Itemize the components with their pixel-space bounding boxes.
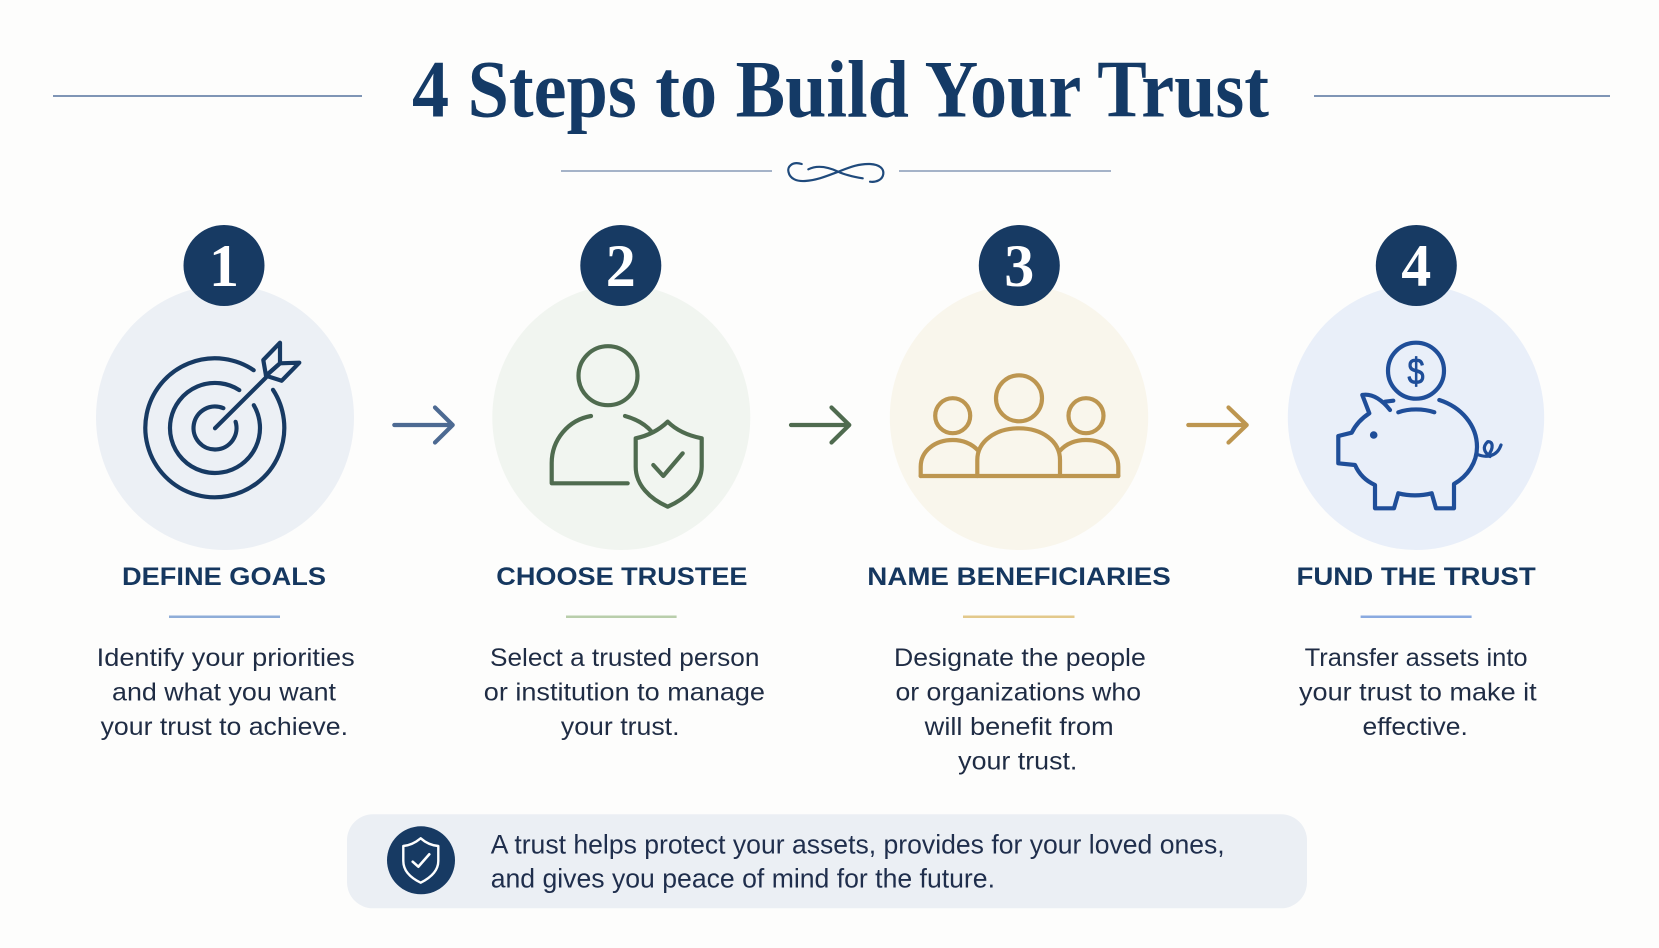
step 2 description: your trust. xyxy=(561,713,680,741)
step 1 number badge xyxy=(184,225,264,306)
icon: shield badge xyxy=(387,826,455,894)
title: 4 Steps to Build Your Trust xyxy=(412,44,1269,134)
step 4 number badge xyxy=(1376,225,1457,306)
arrow 2 xyxy=(791,408,849,442)
callout text xyxy=(491,830,1225,894)
step 1 background circle xyxy=(96,285,354,550)
step 3 number badge xyxy=(979,225,1060,306)
step 2: choose trustee xyxy=(484,225,765,741)
icon: piggy bank with coin: $ xyxy=(1408,351,1424,392)
step 2 heading: CHOOSE TRUSTEE xyxy=(496,563,748,591)
step 3 description: will benefit from xyxy=(924,713,1114,741)
step 3 description xyxy=(894,644,1146,776)
icon: target with arrow xyxy=(145,343,299,497)
step 3: name beneficiaries xyxy=(867,225,1171,776)
arrow 3 xyxy=(1188,408,1247,442)
callout text: and gives you peace of mind for the future. xyxy=(491,864,995,894)
icon: person with shield xyxy=(552,346,702,507)
step 1 description: your trust to achieve. xyxy=(101,713,348,741)
step 3 number badge: 3 xyxy=(1004,233,1034,299)
step 3 description: or organizations who xyxy=(896,678,1141,706)
step 3 description: your trust. xyxy=(958,748,1077,776)
step 2 description: Select a trusted person xyxy=(490,644,759,672)
callout: summary panel xyxy=(347,814,1307,908)
step 4 heading: FUND THE TRUST xyxy=(1296,563,1536,591)
step 1 description: Identify your priorities xyxy=(97,644,355,672)
step 4 description xyxy=(1299,644,1537,741)
step 1: define goals xyxy=(96,225,355,741)
step 1 heading: DEFINE GOALS xyxy=(122,563,326,591)
step 1 description: and what you want xyxy=(112,678,336,706)
icon: piggy bank with coin xyxy=(1338,343,1501,508)
step 4 number badge: 4 xyxy=(1401,233,1431,299)
step 2 description: or institution to manage xyxy=(484,678,765,706)
step 3 background circle xyxy=(890,285,1148,550)
step 1 description xyxy=(97,644,355,741)
icon: three people xyxy=(921,375,1118,476)
step 2 number badge xyxy=(580,225,661,306)
step 2 number badge: 2 xyxy=(606,233,636,299)
step 3 description: Designate the people xyxy=(894,644,1146,672)
arrow 1 xyxy=(394,408,453,442)
step 4 background circle xyxy=(1288,285,1544,550)
step 1 number badge: 1 xyxy=(209,233,239,299)
step 4 description: your trust to make it xyxy=(1299,678,1537,706)
step 2 description xyxy=(484,644,765,741)
step 3 heading: NAME BENEFICIARIES xyxy=(867,563,1171,591)
step 4 description: Transfer assets into xyxy=(1305,644,1528,672)
icon: title flourish xyxy=(788,163,883,182)
step 2 background circle xyxy=(492,285,750,550)
step 4: fund the trust xyxy=(1288,225,1544,741)
step 4 description: effective. xyxy=(1362,713,1468,741)
callout text: A trust helps protect your assets, provides for your loved ones, xyxy=(491,830,1225,860)
